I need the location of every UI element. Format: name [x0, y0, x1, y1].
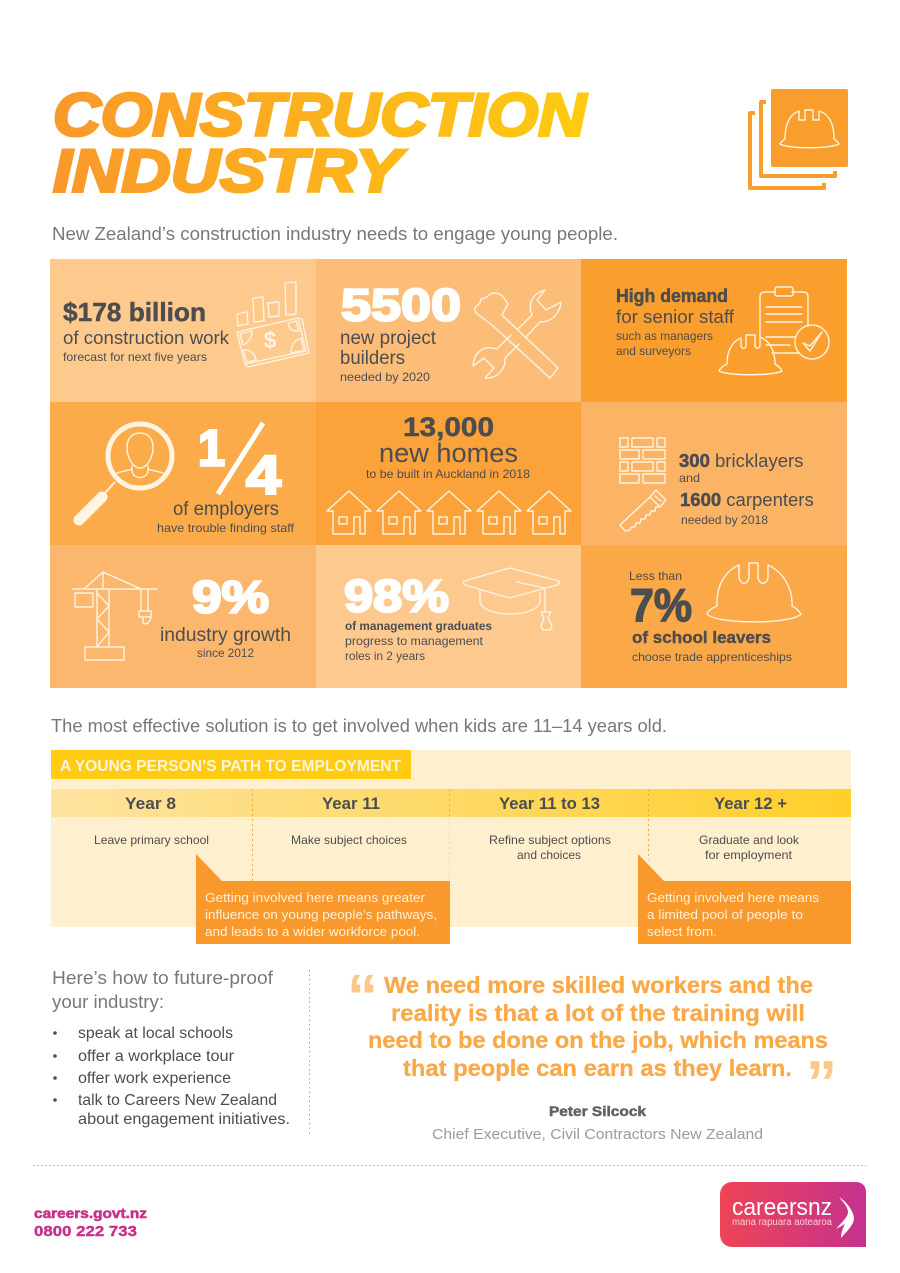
- panel: one quarter of employers: have trouble finding staff: [157, 521, 295, 535]
- quote: [347, 963, 837, 1143]
- text block: future-proof list: talk to Careers New Zealand: [78, 1092, 277, 1109]
- step descriptions: Leave primary school: [94, 833, 209, 847]
- attribution: Peter Silcock: [549, 1104, 647, 1119]
- panel: bricklayers and carpenters: needed by 2018: [681, 513, 768, 527]
- panel: 178 billion: [63, 282, 309, 367]
- quote: that people can earn as they learn.: [403, 1055, 792, 1081]
- quote: We need more skilled workers and the: [384, 972, 813, 998]
- icon: logo swoosh: [836, 1197, 854, 1238]
- icon: hard hat: [707, 563, 801, 622]
- intro sentence: New Zealand’s construction industry needs to engage young people.: [52, 224, 618, 244]
- icon: magnifying glass with person: [79, 424, 172, 520]
- text block: future-proof list: about engagement initiatives.: [78, 1111, 290, 1128]
- fraction one quarter: 1: [198, 420, 225, 476]
- logo: careers nz: mana rapuara aotearoa: [732, 1217, 832, 1228]
- panel: 13,000 new homes: new homes: [379, 438, 518, 468]
- quote: need to be done on the job, which means: [368, 1027, 828, 1053]
- panel: high demand senior staff: [616, 286, 829, 375]
- callout: greater influence: influence on young people’s pathways,: [205, 907, 437, 922]
- icon: money and rising bars: [237, 282, 309, 367]
- icon: hand saw: [620, 490, 666, 531]
- panel: bricklayers and carpenters: 1600 carpenters: [680, 489, 814, 510]
- text block: future-proof list: [52, 968, 290, 1128]
- icon: opening quote mark: “: [347, 963, 378, 1032]
- icon: five houses: [327, 491, 571, 534]
- contact details: 0800 222 733: [34, 1224, 137, 1240]
- callout: greater influence: [196, 854, 450, 944]
- step descriptions: Graduate and look: [699, 833, 800, 847]
- icon: clipboard, check and hard hat: [719, 287, 829, 375]
- step descriptions: [94, 833, 800, 862]
- icon: graduation cap: [463, 568, 559, 630]
- step descriptions: and choices: [517, 848, 581, 862]
- icon: dollar sign: $: [264, 327, 277, 353]
- callout: limited pool: select from.: [647, 924, 717, 939]
- quote: reality is that a lot of the training will: [391, 1000, 805, 1026]
- callout: limited pool: [638, 854, 851, 944]
- panel: 9 percent growth: since 2012: [197, 646, 254, 660]
- text block: future-proof list: offer work experience: [78, 1070, 231, 1087]
- icon: brick wall: [620, 438, 665, 483]
- panel: statistics grid: [50, 259, 847, 688]
- icon: tower crane: [73, 572, 157, 660]
- text block: future-proof list: offer a workplace tour: [78, 1048, 234, 1065]
- year band: Year 8: [125, 795, 176, 813]
- icon: hammer and wrench: [473, 290, 561, 378]
- panel: 178 billion: $178 billion: [63, 297, 206, 327]
- panel: 98 percent graduates: progress to management: [345, 634, 484, 648]
- panel: 13,000 new homes: to be built in Auckland in 2018: [366, 467, 530, 481]
- title: CONSTRUCTION: [53, 82, 588, 148]
- panel: 5500 project builders: 5500: [341, 280, 461, 330]
- panel: 98 percent graduates: [344, 568, 559, 663]
- fraction one quarter: 4: [246, 444, 281, 506]
- panel: 9 percent growth: industry growth: [160, 625, 291, 646]
- panel: bricklayers and carpenters: and: [679, 471, 700, 485]
- panel: 98 percent graduates: 98%: [344, 570, 449, 622]
- fraction one quarter: [198, 420, 281, 506]
- panel: 9 percent growth: 9%: [192, 572, 269, 622]
- panel: bricklayers and carpenters: [620, 438, 814, 531]
- panel: 178 billion: forecast for next five years: [63, 350, 207, 364]
- title: INDUSTRY: [53, 138, 407, 204]
- panel: one quarter of employers: [79, 420, 295, 535]
- step descriptions: Refine subject options: [489, 833, 611, 847]
- panel: 13,000 new homes: [327, 412, 571, 534]
- panel: 13,000 new homes: 13,000: [403, 412, 494, 442]
- year band: Year 12 +: [714, 795, 787, 813]
- panel: 98 percent graduates: roles in 2 years: [345, 649, 425, 663]
- logo: careers nz: [720, 1182, 866, 1247]
- solution sentence: The most effective solution is to get involved when kids are 11–14 years old.: [51, 716, 667, 736]
- year band: [51, 789, 851, 817]
- icon: stacked cards with hard hat: [750, 89, 848, 188]
- panel: path to employment: [51, 750, 851, 944]
- callout: limited pool: a limited pool of people to: [647, 907, 803, 922]
- panel: 7 percent school leavers: 7%: [630, 579, 692, 631]
- panel: 178 billion: of construction work: [63, 327, 230, 348]
- panel: 5500 project builders: [340, 280, 561, 384]
- title: [53, 82, 588, 204]
- year band: Year 11: [322, 795, 380, 813]
- text block: future-proof list: Here’s how to future-proof: [52, 968, 274, 988]
- panel: high demand senior staff: High demand: [616, 286, 728, 306]
- icon: closing quote mark: ”: [806, 1049, 837, 1118]
- step descriptions: Make subject choices: [291, 833, 407, 847]
- panel: 7 percent school leavers: choose trade apprenticeships: [632, 650, 792, 664]
- panel: 5500 project builders: new project: [340, 328, 437, 349]
- callout: limited pool: Getting involved here means: [647, 890, 820, 905]
- panel: bricklayers and carpenters: 300 bricklayers: [679, 450, 803, 471]
- panel: 5500 project builders: builders: [340, 348, 405, 369]
- step descriptions: for employment: [705, 848, 793, 862]
- panel: high demand senior staff: for senior staff: [616, 307, 735, 327]
- heading: path to employment: [51, 750, 411, 779]
- panel: 5500 project builders: needed by 2020: [340, 370, 430, 384]
- panel: high demand senior staff: such as managers: [616, 329, 713, 343]
- panel: one quarter of employers: of employers: [173, 499, 279, 520]
- text block: future-proof list: your industry:: [52, 992, 164, 1012]
- year band: Year 11 to 13: [499, 795, 600, 813]
- contact details: [34, 1205, 147, 1240]
- logo: careers nz: careersnz: [732, 1194, 832, 1221]
- panel: 7 percent school leavers: [629, 563, 801, 664]
- panel: 7 percent school leavers: Less than: [629, 569, 682, 583]
- panel: high demand senior staff: and surveyors: [616, 344, 691, 358]
- quote: Chief Executive, Civil Contractors New Zealand: [432, 1126, 763, 1143]
- panel: 98 percent graduates: of management graduates: [345, 619, 492, 633]
- callout: greater influence: Getting involved here means greater: [205, 890, 426, 905]
- callout: greater influence: and leads to a wider workforce pool.: [205, 924, 420, 939]
- panel: 7 percent school leavers: of school leavers: [632, 628, 771, 647]
- text block: future-proof list: speak at local schools: [78, 1025, 233, 1042]
- contact details: careers.govt.nz: [34, 1205, 147, 1221]
- panel: 9 percent growth: [73, 572, 291, 660]
- heading: path to employment: A YOUNG PERSON’S PATH TO EMPLOYMENT: [60, 758, 402, 775]
